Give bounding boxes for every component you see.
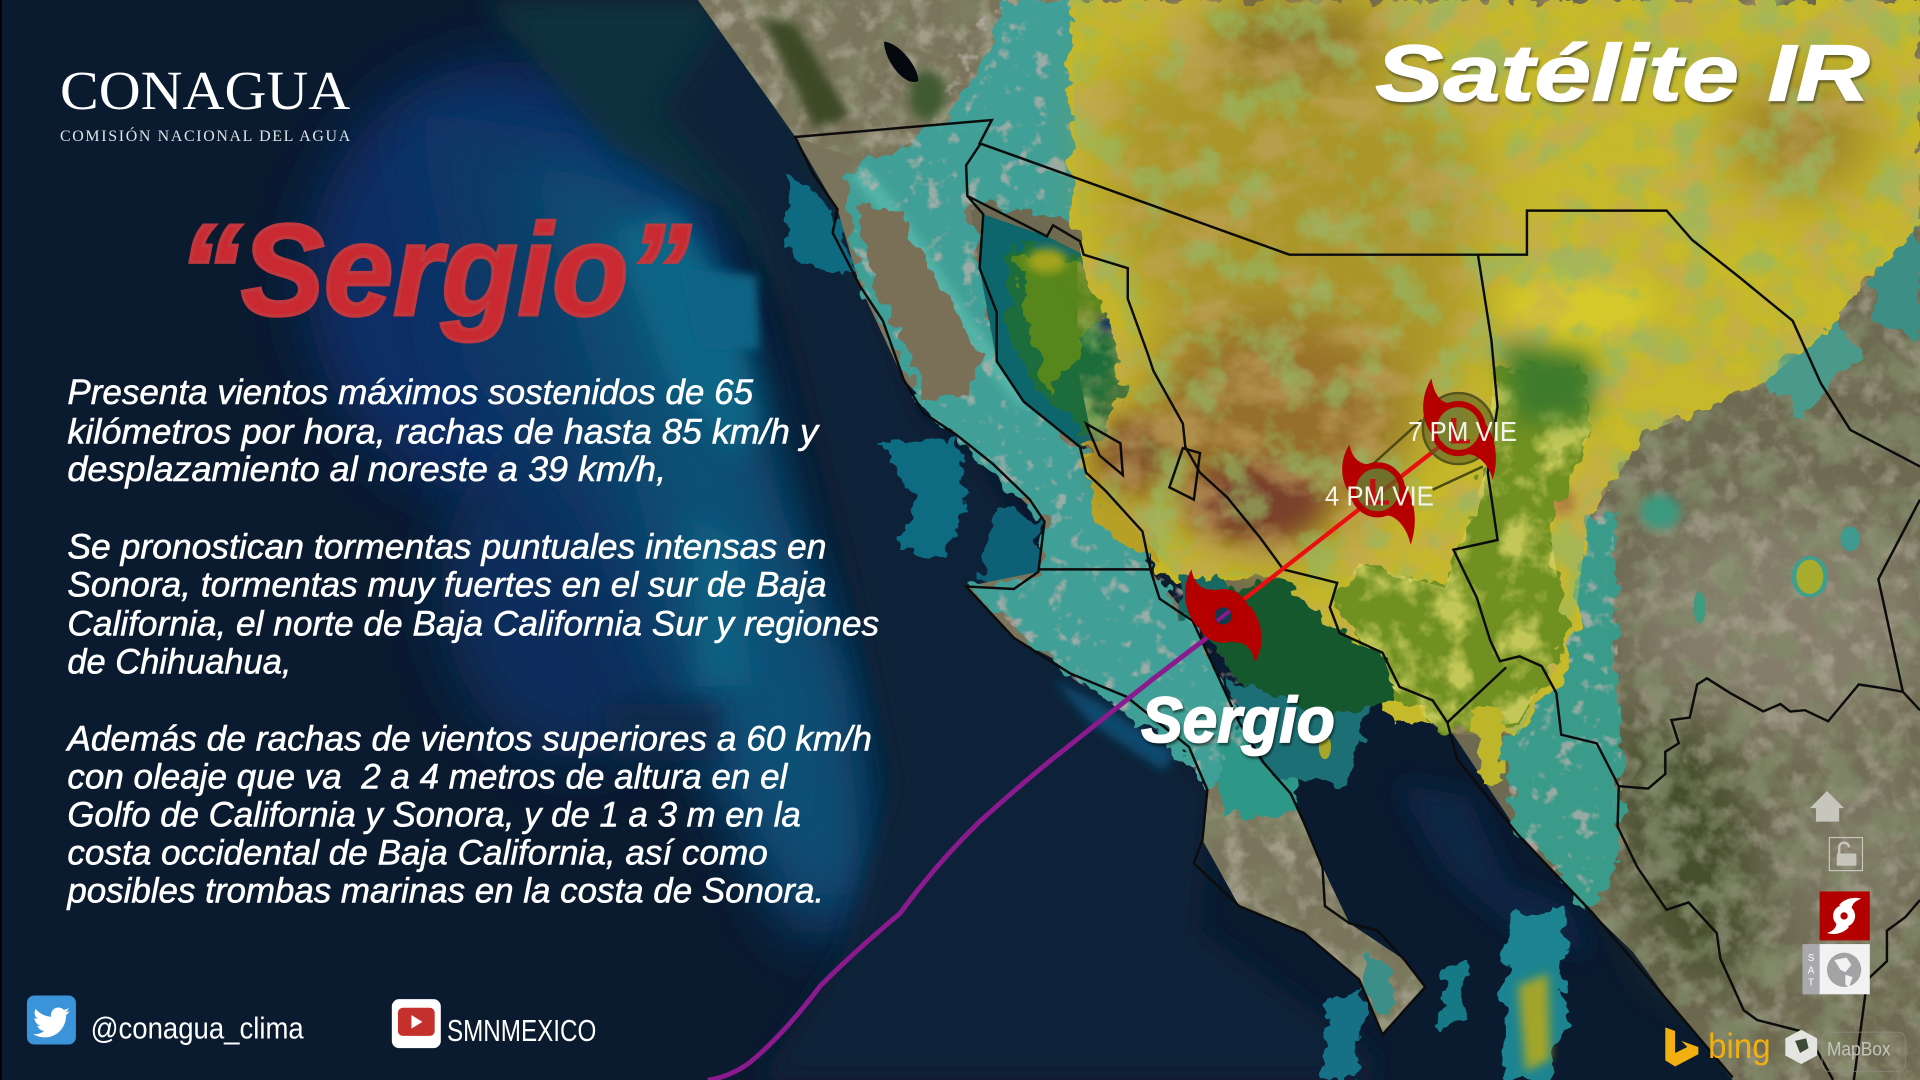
icon: 4 PM forecast storm: L	[1368, 471, 1390, 512]
text block: rain forecast: California, el norte de Baja California Sur y regiones	[67, 604, 879, 644]
icon: YouTube	[392, 999, 441, 1048]
logo: CONAGUA: CONAGUA	[60, 60, 350, 121]
label: Sergio storm name: Sergio	[1141, 685, 1335, 756]
logo: MapBox	[1785, 1030, 1905, 1071]
forecast cone lines	[1370, 420, 1483, 490]
panel: yellow and orange infrared clouds	[1060, 0, 1920, 736]
map boundary lines	[793, 120, 1920, 1080]
text block: rain forecast: Sonora, tormentas muy fuertes en el sur de Baja	[67, 564, 827, 604]
icon: satellite globe button: T	[1808, 978, 1814, 989]
icon: 7 PM forecast storm: L	[1449, 410, 1471, 451]
logo: CONAGUA	[60, 60, 351, 145]
title: Satélite IR: Satélite IR	[1375, 28, 1870, 117]
panel: teal cloud layer over Baja	[842, 0, 1920, 910]
panel: rain bands over the ocean	[1322, 912, 1567, 1080]
text block: storm conditions: kilómetros por hora, rachas de hasta 85 km/h y	[67, 411, 820, 451]
icon: Twitter	[27, 996, 76, 1044]
text block: wind and waves: Golfo de California y Sonora, y de 1 a 3 m en la	[67, 795, 801, 835]
logo: MapBox: MapBox	[1827, 1039, 1891, 1061]
logo: bing: bing	[1708, 1026, 1771, 1066]
text block: storm conditions: desplazamiento al noreste a 39 km/h,	[67, 449, 666, 489]
icon: satellite globe button	[1802, 944, 1870, 994]
panel: land mass base	[698, 0, 1920, 1080]
text block: wind and waves: posibles trombas marinas en la costa de Sonora.	[66, 870, 824, 910]
text block: rain forecast: Se pronostican tormentas puntuales intensas en	[67, 526, 827, 566]
label: 4 PM VIE: 4 PM VIE	[1325, 481, 1434, 512]
logo: CONAGUA: COMISIÓN NACIONAL DEL AGUA	[60, 126, 351, 145]
icon: satellite globe button: S	[1808, 953, 1815, 964]
icon: 4 PM forecast storm	[1342, 444, 1415, 545]
text block: rain forecast: de Chihuahua,	[67, 641, 291, 681]
label: YouTube channel: SMNMEXICO	[447, 1014, 596, 1048]
text block: rain forecast	[67, 526, 879, 681]
heading: Sergio: “Sergio”	[179, 198, 691, 343]
text block: storm conditions	[67, 372, 820, 489]
text block: wind and waves	[65, 719, 872, 910]
mottling	[1070, 0, 1920, 734]
panel: Baja California peninsula	[698, 0, 1424, 1032]
text block: wind and waves: costa occidental de Baja California, así como	[67, 832, 768, 872]
label: 7 PM VIE: 7 PM VIE	[1408, 416, 1517, 447]
icon: satellite globe button: A	[1808, 965, 1815, 976]
icon: home button	[1810, 791, 1844, 822]
icon: lock button	[1829, 838, 1862, 871]
orange centre	[1102, 24, 1482, 576]
icon: Sergio current position storm	[1185, 569, 1262, 662]
logo: bing	[1665, 1026, 1771, 1067]
brown central Baja land patch	[860, 202, 980, 398]
text block: wind and waves: Además de rachas de vientos superiores a 60 km/h	[65, 719, 872, 759]
purple past track	[708, 632, 1215, 1080]
icon: hurricane button	[1820, 891, 1870, 940]
icon: salt lake	[884, 42, 918, 82]
panel: green clouds over Sonora and Chihuahua	[1178, 326, 1610, 789]
red forecast track	[1237, 443, 1444, 605]
text block: storm conditions: Presenta vientos máximos sostenidos de 65	[67, 372, 753, 412]
panel: dark green Gulf of California clouds	[980, 214, 1183, 447]
label: Twitter handle: @conagua_clima	[91, 1011, 305, 1045]
icon: 7 PM forecast storm	[1423, 378, 1496, 480]
text block: wind and waves: con oleaje que va 2 a 4 metros de altura en el	[67, 757, 788, 797]
